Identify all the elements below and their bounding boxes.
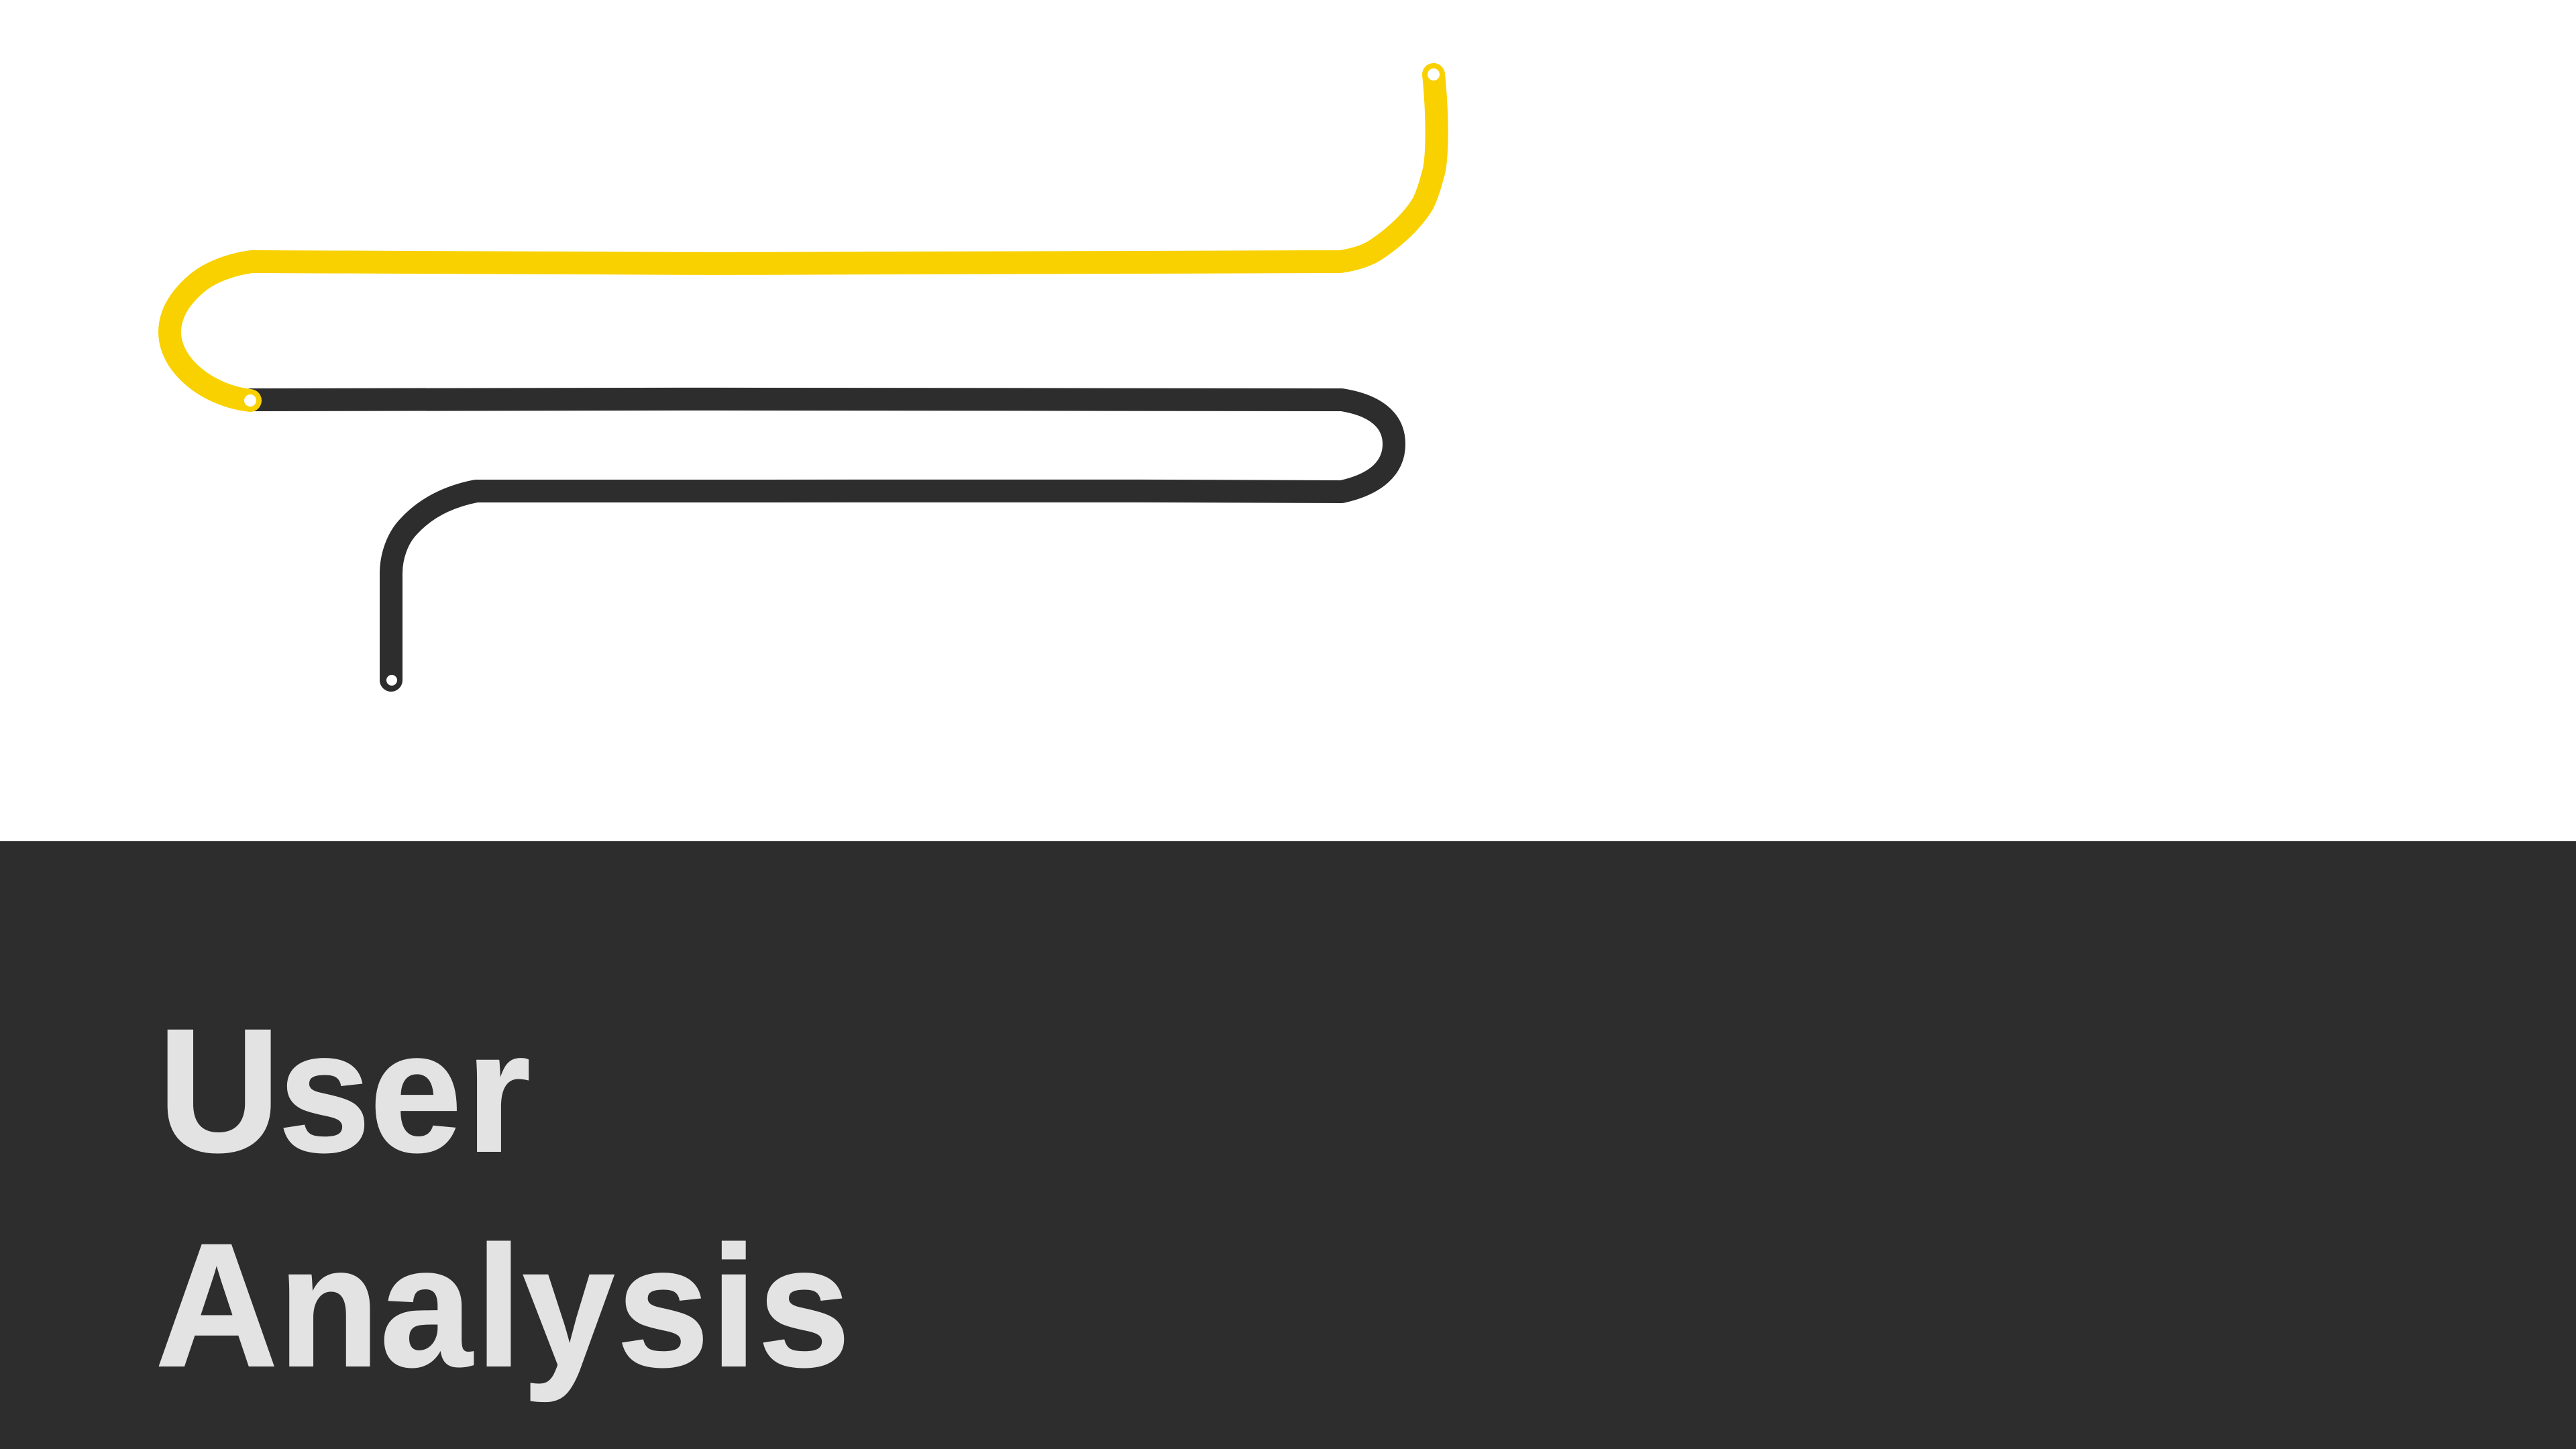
yellow line end marker	[1428, 68, 1440, 80]
dark title panel	[0, 841, 2576, 1449]
dark line segment	[250, 399, 1394, 686]
title line: Analysis: Analysis	[156, 1207, 850, 1403]
yellow line start marker	[244, 394, 256, 407]
journey line chart	[158, 63, 1448, 692]
yellow line segment	[170, 68, 1440, 407]
title line: User: User	[158, 992, 531, 1189]
dark line end marker	[386, 675, 397, 686]
